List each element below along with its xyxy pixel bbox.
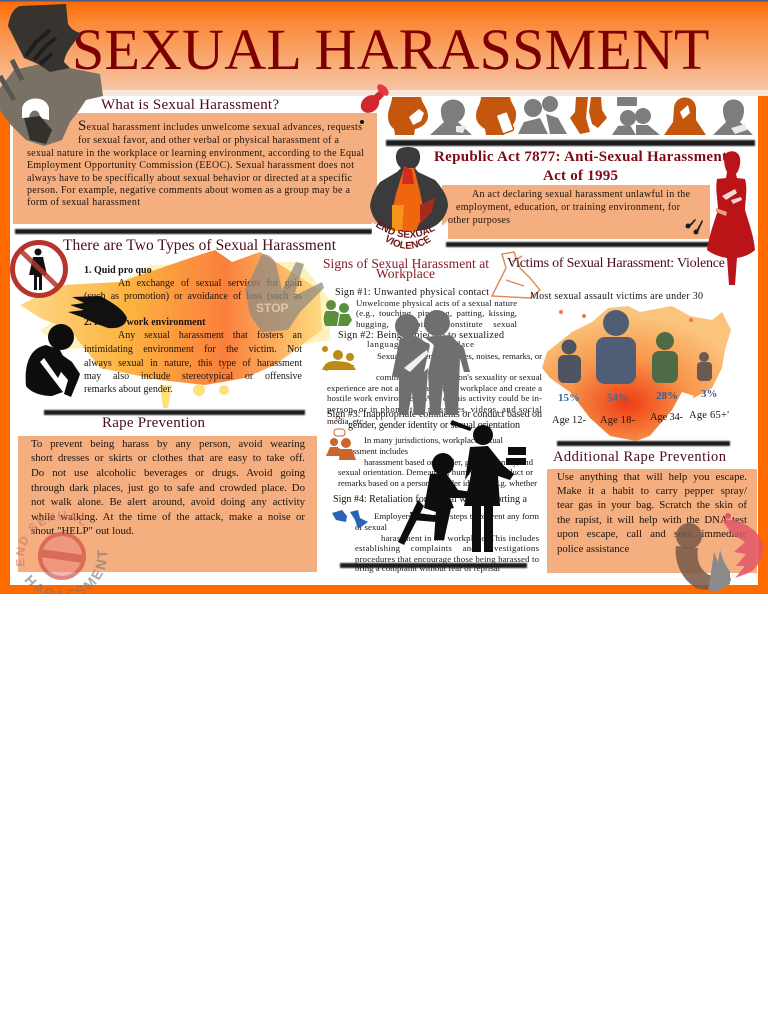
background frame <box>0 0 768 594</box>
text: sign 1: Unwelcome physical acts of a sexual nature <box>356 298 517 308</box>
text: sign 4: Employers must take steps to prevent any form <box>374 511 539 521</box>
icon: end harassment stamp <box>16 511 108 594</box>
text: act description: other purposes <box>448 215 510 226</box>
chart: age pictogram <box>552 310 729 426</box>
icon: woman <box>430 100 472 135</box>
icon: hands <box>570 97 607 134</box>
splash: victims background <box>542 306 731 441</box>
icon: red dress woman <box>707 151 755 285</box>
icon: stop hand: STOP <box>256 301 288 315</box>
text: rape prevention: Do not use alcoholic beverages or drugs. Avoid going <box>31 467 305 479</box>
text: sign 4: of sexual <box>355 522 388 532</box>
text: act description: An act declaring sexual harassment unlawful in the <box>472 189 691 200</box>
text: sign 2 <box>325 330 543 426</box>
divider: signs bottom <box>340 563 527 568</box>
person: age 18-34 <box>596 310 636 384</box>
values <box>558 388 718 404</box>
heading: republic act <box>434 149 727 184</box>
divider rules <box>15 140 755 446</box>
text: sign 3 <box>327 409 542 488</box>
heading: signs: Workplace <box>376 266 435 281</box>
heading: republic act: Republic Act 7877: Anti-Sexual Harassment <box>434 149 727 165</box>
labels: Age 18- <box>600 415 636 426</box>
icon: stop hand <box>245 254 324 332</box>
icon: end harassment stamp: HARASSMENT <box>24 550 108 594</box>
text: sign 4: harassment in the workplace. This includes <box>381 533 540 543</box>
text: hostile work environment: always sexual in nature, this type of harassment <box>84 358 302 369</box>
text: sign 3: harassment includes <box>338 446 409 456</box>
text: sign 2: Sign #2: Being subjected to sexualized <box>338 330 504 341</box>
labels <box>552 410 729 426</box>
text: sign 2: hostile work environment. Any of this activity could be in- <box>327 393 542 403</box>
text: act description <box>448 189 691 226</box>
text: sign 2: experience are not appropriate in the workplace and create a <box>327 383 542 393</box>
text: rape prevention: shout "HELP" out loud. <box>31 525 134 537</box>
text: definition <box>27 118 364 208</box>
icon: line figure <box>492 252 540 298</box>
text: definition: form of sexual harassment <box>27 197 140 208</box>
text: additional prevention: the rapist, it will help with the DNA test <box>557 514 747 526</box>
icon: speech couple <box>612 97 660 135</box>
text: sign 3: Sign #3: Inappropriate comments or conduct based on <box>327 409 542 420</box>
text: rape prevention <box>31 437 305 539</box>
text: definition: Employment Opportunity Commission (EEOC). Sexual harassment does not <box>27 160 354 171</box>
text: quid pro quo: (such as promotion) or avoidance of loss (such as <box>84 291 302 302</box>
heading: additional rape prevention: Additional Rape Prevention <box>553 449 727 465</box>
icon: grey couple <box>392 310 470 415</box>
text: sign 2: jokes or <box>325 361 354 371</box>
text: sign 2: person, or in phone, text messages, videos, and social <box>327 404 543 414</box>
icon: bottom <box>388 97 428 135</box>
panel: two types <box>63 237 337 397</box>
icon: end sexual violence: VIOLENCE <box>386 234 432 249</box>
text: quid pro quo: gain). <box>84 304 107 315</box>
splash: types background <box>20 250 330 408</box>
title: SEXUAL HARASSMENT <box>72 17 710 82</box>
icon: green people <box>324 300 352 326</box>
labels: Age 65+' <box>689 410 729 421</box>
text: sign 3: harassment based on gender, gender identity, and <box>364 457 534 467</box>
text: additional prevention: Use anything that will help you escape. <box>557 471 747 483</box>
panel: what is sexual harassment <box>13 97 377 224</box>
text: definition: always have to be specifically about sexual behavior or directed at a specific <box>27 173 353 184</box>
panel: signs of harassment <box>323 256 543 573</box>
heading: republic act: Act of 1995 <box>543 168 618 184</box>
text: sign 2: media, etc. <box>327 416 365 426</box>
text: quid pro quo <box>84 264 302 317</box>
text: hostile work environment: may also include stereotypical or offensive <box>84 371 302 382</box>
heading: signs <box>323 256 489 281</box>
text: sign 4: procedures that encourage those being harassed to <box>355 554 540 564</box>
text: sign 1: hugging, grabbing) constitute sexual <box>356 319 518 329</box>
text: rape prevention: short dresses or skirts or clothes that are easy to take off. <box>31 452 305 464</box>
icon: end harassment stamp: END SEXUAL <box>16 511 84 566</box>
text: sign 3: gender, gender identity or sexual orientation <box>348 420 520 431</box>
text: sign 1 <box>335 287 518 329</box>
icon: black hand <box>68 296 127 328</box>
text: sign 4 <box>333 494 540 573</box>
values: 3% <box>701 388 718 400</box>
text: hostile work environment: remarks about gender. <box>84 384 173 395</box>
text: quid pro quo: 1. Quid pro quo <box>84 265 152 276</box>
panel: rape prevention <box>18 415 317 572</box>
icon: orange people <box>326 429 356 460</box>
text: rape prevention: To prevent being harass by any person, avoid wearing <box>31 438 305 450</box>
panel: additional rape prevention <box>547 449 757 573</box>
text: rape prevention: while walking. At the time of the attack, make a noise or <box>31 511 305 523</box>
text: sign 1: (e.g., touching, pinching, patting, kissing, <box>356 308 517 318</box>
text: sign 3: In many jurisdictions, workplace sexual <box>364 435 504 445</box>
panel: victims <box>507 256 729 426</box>
icon: small keys <box>686 219 703 234</box>
values: 54% <box>607 392 629 404</box>
heading: what is sexual harassment: What is Sexual Harassment? <box>101 97 279 113</box>
icon: gold people <box>322 346 356 370</box>
text: sign 4: Sign #4: Retaliation for refusal when reporting a <box>333 494 528 505</box>
text: rape prevention: not walk alone. Be alert around, avoid doing any activity <box>31 496 305 508</box>
panel: republic act <box>434 149 727 239</box>
heading: victims: Victims of Sexual Harassment: Violence <box>507 256 725 271</box>
icon: hands and victim <box>676 513 763 592</box>
text: definition: for sexual favor, and other verbal or physical harassment of a <box>78 135 340 146</box>
person: age 12-17 <box>558 340 581 383</box>
text: hostile work environment: Any sexual harassment that fosters an <box>118 330 302 341</box>
text: rape prevention: through dark places, just go to safe and crowded place. Do <box>31 482 305 494</box>
text: hostile work environment: intimidating environment for the victim. Not <box>84 344 302 355</box>
icon: couple <box>518 96 567 134</box>
text: hostile work environment <box>84 317 302 397</box>
text: sign 3: remarks based on a person's gender identity (e.g. whether <box>338 478 537 488</box>
icon: end sexual violence <box>370 147 448 249</box>
icon: woman covering mouth <box>664 98 706 135</box>
text: additional prevention: police assistance <box>557 543 629 555</box>
icon: woman <box>713 100 753 135</box>
icon row: harassment pictograms <box>388 96 753 135</box>
heading: rape prevention: Rape Prevention <box>102 415 206 431</box>
text: additional prevention: tear gas in your bag. Scratch the skin of <box>557 499 747 511</box>
person: age 65+ <box>697 352 712 381</box>
text: sign 1: Sign #1: Unwanted physical contact <box>335 287 489 298</box>
text: definition: person. For example, negative comments about women as a group may be a <box>27 185 351 196</box>
text: sign 2: language in the workplace <box>367 339 474 349</box>
text: sign 4: establishing complaints and investigations <box>355 543 540 553</box>
icon: teacher and student <box>398 420 526 552</box>
values: 28% <box>656 390 678 402</box>
text: additional prevention <box>557 470 747 556</box>
icon: end sexual violence: END SEXUAL <box>376 220 436 238</box>
heading: signs: Signs of Sexual Harassment at <box>323 256 489 271</box>
text: additional prevention: Make it a habit to carry pepper spray/ <box>557 485 747 497</box>
text: act description: employment, education, or training environment, for <box>456 202 681 213</box>
text: definition: sexual nature in the workplace or learning environment, according to the Equal <box>27 148 364 159</box>
text: victims subtitle: Most sexual assault victims are under 30 <box>530 291 703 302</box>
icon: no woman sign <box>12 242 66 296</box>
text: sign 2: Sexual comments, gestures, noises, remarks, or <box>377 351 542 361</box>
icon: sitting person <box>26 324 80 397</box>
icon: bottom and phone <box>476 97 516 135</box>
text: hostile work environment: 2. Hostile work environment <box>84 317 205 328</box>
text: definition: Sexual harassment includes unwelcome sexual advances, requests <box>78 118 362 134</box>
text: sign 2: comments about a person's sexuality or sexual <box>376 372 543 382</box>
heading: two types: There are Two Types of Sexual Harassment <box>63 237 337 254</box>
icon: woman and shadow figure <box>0 4 103 146</box>
text: quid pro quo: An exchange of sexual services for gain <box>118 278 302 289</box>
text: additional prevention: upon escape, call and seek immediate <box>557 528 747 540</box>
values: 15% <box>558 392 580 404</box>
icon: blue figures <box>332 510 368 529</box>
icon: push pin <box>357 82 391 124</box>
labels: Age 34- <box>650 412 684 423</box>
person: age 34-64 <box>652 332 678 383</box>
text: sign 4: bring a complaint without fear of reprisal <box>355 563 501 573</box>
labels: Age 12- <box>552 415 586 426</box>
text: sign 3: sexual orientation. Demeaning, humiliating conduct or <box>338 467 533 477</box>
